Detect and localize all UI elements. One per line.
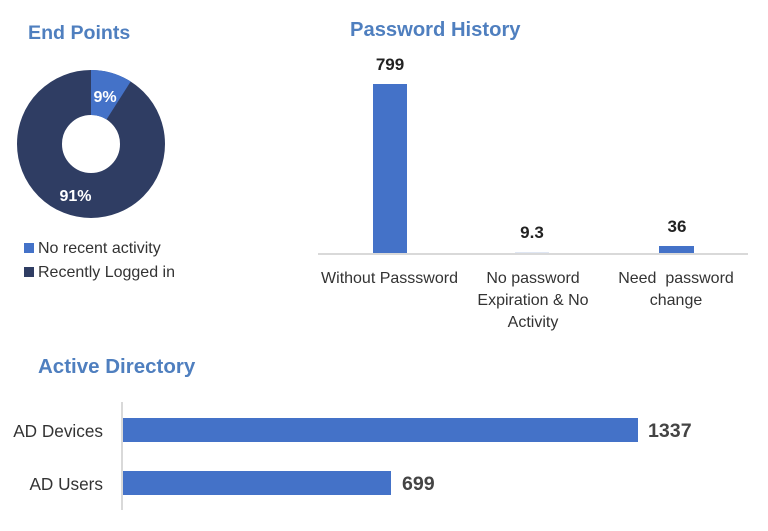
bar chart: Password History: Activity — [508, 314, 558, 331]
bar chart: Active Directory: 1337 — [648, 420, 692, 442]
bar chart: Password History: 799 — [376, 55, 404, 74]
heading: Password History: Password History — [350, 19, 521, 41]
bar chart: Password History: Need password — [618, 270, 734, 287]
bar chart: Active Directory: 699 — [402, 473, 435, 495]
bar chart: Active Directory: AD Devices — [13, 421, 103, 441]
legend: donut chart — [24, 240, 175, 281]
bar chart: Password History — [318, 55, 748, 331]
bar chart: Password History: 36 — [668, 217, 686, 236]
bar chart: Password History: Without Passsword — [321, 270, 458, 287]
bar chart: Active Directory: AD Users — [29, 474, 103, 494]
bar chart: Active Directory — [13, 402, 692, 510]
donut chart: End Points: 9% — [93, 89, 117, 106]
donut chart: End Points: 91% — [59, 188, 92, 205]
bar chart: Password History: 9.3 — [520, 223, 544, 242]
heading: Active Directory: Active Directory — [38, 355, 195, 378]
legend: donut chart: No recent activity — [38, 240, 161, 257]
donut chart: End Points — [17, 70, 165, 218]
bar chart: Password History: No password — [486, 270, 580, 287]
heading: End Points: End Points — [28, 22, 130, 44]
bar chart: Password History: Expiration & No — [477, 292, 589, 309]
legend: donut chart: Recently Logged in — [38, 264, 175, 281]
bar chart: Password History: change — [650, 292, 702, 309]
